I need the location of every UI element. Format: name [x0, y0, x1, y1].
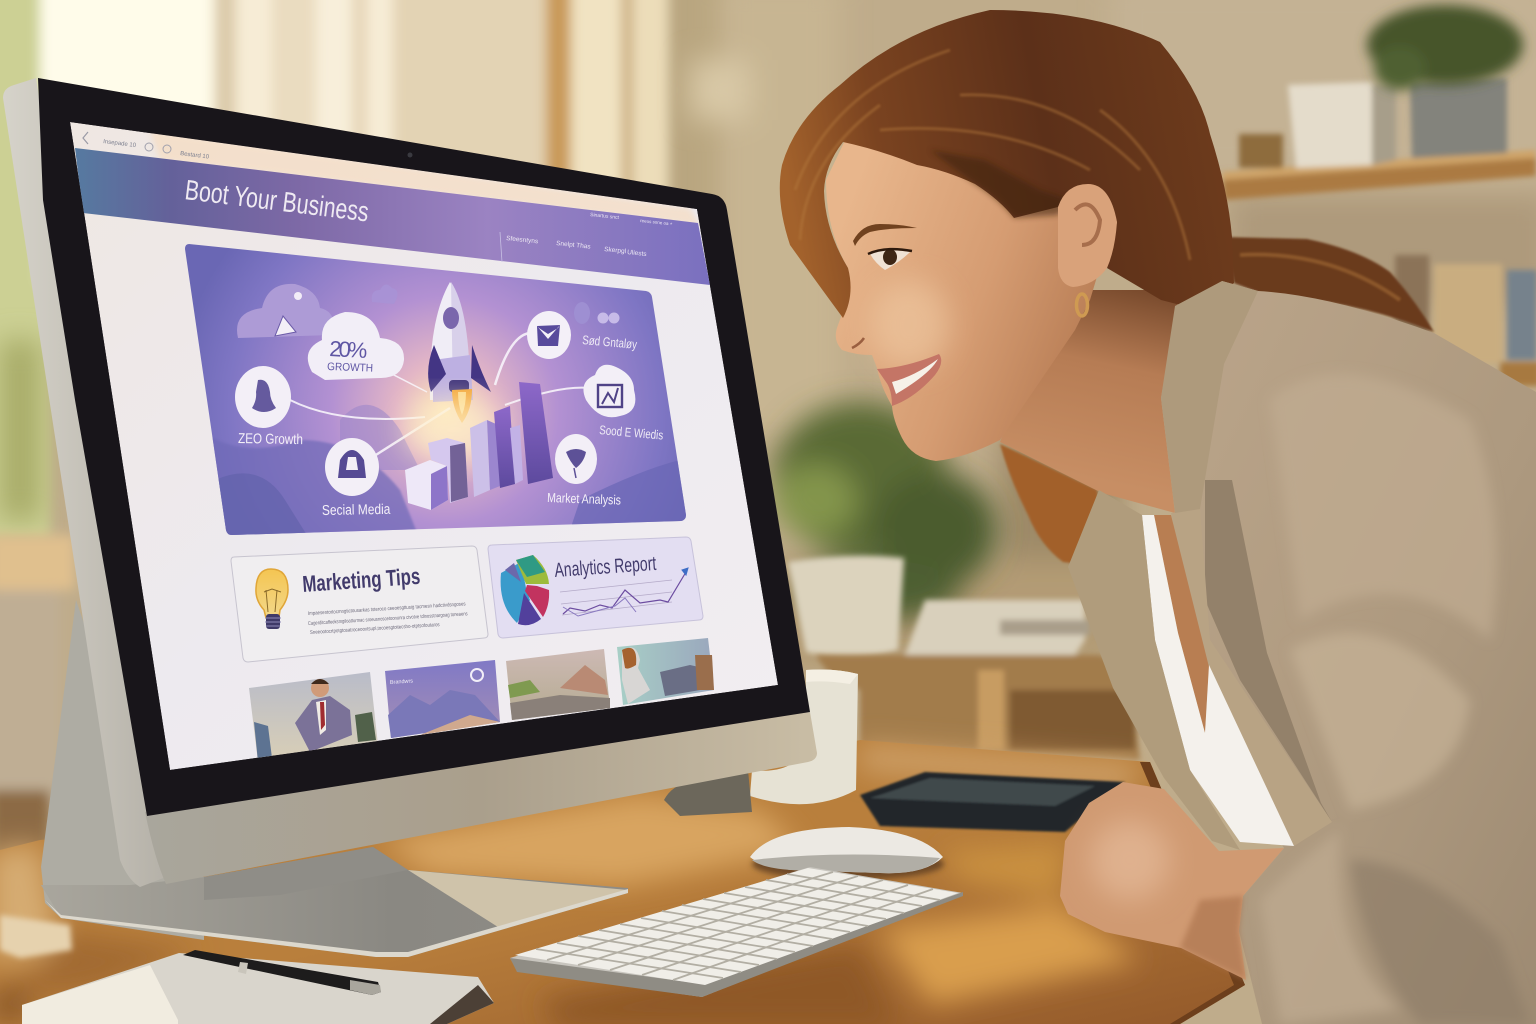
icon: light bulb [256, 569, 288, 629]
webcam dot [408, 152, 412, 158]
smile [877, 354, 941, 406]
icon: market analysis circle [555, 434, 597, 484]
connector lines [290, 333, 590, 465]
body text [308, 601, 468, 636]
earring [1076, 294, 1088, 316]
black bezel [38, 78, 810, 816]
computer mouse [750, 827, 944, 880]
header navigation: reeus sone oa + [640, 218, 673, 226]
monitor housing [3, 78, 817, 887]
ponytail [1225, 237, 1434, 332]
card: Analytics Report [488, 537, 703, 638]
header navigation: Snelpt Thas [556, 240, 592, 251]
lapel shadow band [1205, 480, 1332, 822]
woman [780, 10, 1536, 1024]
face [826, 130, 1120, 461]
hair shadow at temple [930, 150, 1070, 218]
heading: Boot Your Business: Boot Your Business [183, 174, 370, 228]
header navigation: Uliests [627, 249, 648, 258]
label: Send Gatalog: Sød Gntaløy [582, 334, 638, 352]
silver chin [145, 712, 817, 884]
header navigation: Sfeesntyns [506, 235, 539, 245]
blazer body [1175, 281, 1536, 1024]
cheek highlight [870, 280, 950, 370]
icon: social media circle [325, 438, 379, 496]
body text: Cagerditcaffeeksmgiloatturmac sroeusnoscetoonunra ctvotve tdinosstnargoag toneaens [308, 611, 468, 627]
body text: Sneeootocrtpotgtosatroceooxtsupl,tocoesgtoitecsho-otptsofoutaros [310, 622, 440, 636]
forearm shadow [1180, 896, 1246, 980]
browser toolbar text [83, 132, 210, 161]
dots [574, 302, 620, 324]
cloud with warning icon [237, 284, 334, 338]
notebook and pen [22, 950, 494, 1024]
ear [1058, 184, 1117, 287]
object behind monitor [664, 770, 752, 816]
header navigation: Sinartus snct [590, 212, 620, 221]
icon: cloud analytics [583, 365, 635, 417]
label: ZEO Growth: ZEO Growth [238, 430, 303, 447]
header band [75, 148, 710, 285]
heading: Marketing Tips: Marketing Tips [302, 564, 421, 598]
monitor stand and base [41, 600, 628, 957]
thumbnail: mountains [385, 660, 500, 738]
body text: Impaesentortocmngtictousarkas tsteroco ceeoesgttusig tacmesn hadctivdsngoses [308, 601, 466, 617]
collar [1161, 281, 1258, 513]
base lit area [408, 870, 628, 927]
icon: person circle [235, 366, 291, 428]
small cloud [372, 284, 398, 304]
eye [853, 224, 917, 270]
hills [212, 438, 416, 535]
warm light on toolbar [150, 130, 700, 226]
thumbnail row [249, 638, 714, 762]
sun glow behind chart [405, 398, 505, 462]
base plate [41, 847, 628, 957]
browser toolbar text: Bestard 10 [180, 151, 210, 161]
header navigation: Skerpgl [604, 246, 627, 255]
heading: Analytics Report: Analytics Report [554, 551, 657, 582]
shelf with plant pots [1222, 5, 1536, 386]
chest skin [1154, 515, 1209, 733]
sleeve shading [1260, 374, 1530, 1024]
rocket [428, 282, 491, 423]
cloud: 20% growth: GROWTH [327, 361, 373, 375]
icon: email circle [527, 311, 571, 359]
cloud: 20% growth [308, 312, 404, 380]
header navigation [500, 212, 673, 262]
hero banner [185, 244, 686, 535]
keyboard [510, 867, 963, 997]
background books and side table [815, 600, 1140, 760]
card: Marketing Tips [231, 546, 488, 662]
monitor screen [70, 122, 778, 770]
nostril [852, 338, 864, 348]
window frame lower left [0, 535, 75, 860]
inner ear [1075, 204, 1100, 245]
label: Market Analysis: Market Analysis [547, 490, 621, 508]
hand and forearm [1060, 782, 1284, 980]
thumbnail: landscape [506, 649, 610, 720]
pie chart [501, 555, 549, 625]
silver frame left [3, 78, 166, 887]
white blouse [1142, 515, 1294, 846]
coffee mug [750, 670, 858, 804]
3D bar chart [405, 382, 553, 510]
label: Social Media: Secial Media [322, 501, 391, 518]
thumbnail: woman at screen [617, 638, 714, 705]
browser toolbar text: Insepade 10 [103, 139, 137, 149]
label: Social E Media: Sood E Wiedis [599, 424, 664, 443]
stand arm [41, 600, 204, 940]
thumbnail: presenter [249, 672, 378, 762]
background plant and white pot [772, 402, 997, 658]
thumbnail: mountains: Brandwrs [390, 678, 414, 686]
cloud: 20% growth: 20% [329, 336, 368, 363]
dark tablet on desk [860, 772, 1125, 832]
base edge highlight [45, 889, 628, 957]
right lapel [1171, 509, 1332, 846]
hair highlights [795, 50, 1400, 300]
hair behind neck [1000, 444, 1102, 566]
desk: wooden table top [0, 740, 1245, 1024]
line chart [560, 568, 688, 616]
hand highlight [1090, 820, 1170, 900]
neck [1000, 290, 1180, 513]
hair [780, 10, 1234, 318]
left lapel [1068, 490, 1240, 850]
neck [204, 847, 408, 900]
